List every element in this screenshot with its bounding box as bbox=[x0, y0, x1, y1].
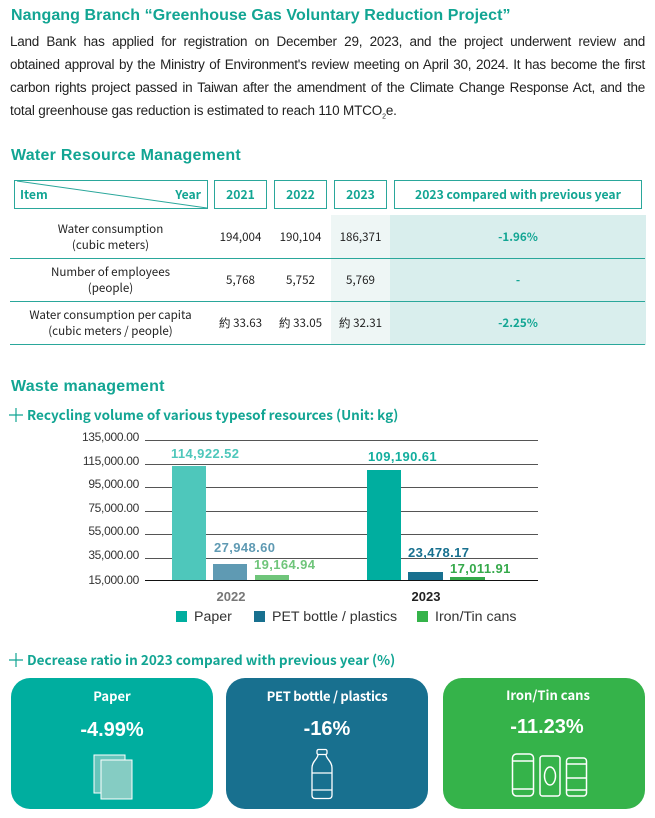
row 2 label: Number of employees bbox=[51, 264, 170, 280]
panel: paper bbox=[11, 678, 213, 809]
paper label: Paper bbox=[93, 686, 131, 705]
header: comparison bbox=[394, 180, 642, 209]
row 3 label: Water consumption per capita bbox=[29, 307, 192, 323]
row 1 2023: 186,371 bbox=[340, 229, 381, 245]
paper value: -4.99% bbox=[80, 719, 144, 741]
y axis labels: 15,000.00 bbox=[88, 573, 140, 587]
text block: project description: Land Bank has applied for registration on December 29, 2023, and the project underwent review and bbox=[10, 34, 645, 49]
heading: Water Resource Management: Water Resource Management bbox=[11, 147, 241, 164]
panel: PET bottle bbox=[226, 678, 428, 809]
header: Item / Year: Year bbox=[175, 185, 201, 203]
text block: project description: total greenhouse gas reduction is estimated to reach 110 MTCO2e. bbox=[10, 103, 397, 121]
y axis labels: 95,000.00 bbox=[88, 477, 140, 491]
highlighted comparison column bbox=[390, 215, 646, 345]
header: Item / Year: Item bbox=[20, 185, 48, 203]
y axis labels: 115,000.00 bbox=[83, 454, 140, 468]
bar chart: recycling volume bbox=[82, 430, 538, 625]
row 3 label: (cubic meters / people) bbox=[48, 323, 173, 339]
value labels: 27,948.60 bbox=[214, 540, 275, 555]
subheading: decrease ratio: Decrease ratio in 2023 compared with previous year (%) bbox=[27, 649, 395, 669]
panel: iron/tin cans bbox=[443, 678, 645, 809]
header: 2023: 2023 bbox=[346, 185, 375, 203]
legend: PET bottle / plastics bbox=[272, 609, 397, 625]
highlighted 2023 column bbox=[331, 215, 390, 345]
PET label: PET bottle / plastics bbox=[267, 686, 387, 705]
header: 2021: 2021 bbox=[226, 185, 255, 203]
row 1 label: (cubic meters) bbox=[72, 237, 149, 253]
row 2 2022: 5,752 bbox=[286, 272, 315, 288]
header: 2021 bbox=[214, 180, 267, 209]
row 3 label bbox=[29, 307, 192, 339]
header: comparison: 2023 compared with previous year bbox=[415, 185, 621, 203]
value labels: 23,478.17 bbox=[408, 545, 469, 560]
PET value: -16% bbox=[304, 718, 350, 740]
row 2 2023: 5,769 bbox=[346, 272, 375, 288]
row 2 label bbox=[51, 264, 170, 296]
row 3 2022: 約 33.05 bbox=[279, 315, 322, 331]
icon: bottle bbox=[311, 748, 333, 800]
cans label: Iron/Tin cans bbox=[506, 685, 590, 704]
text block: project description bbox=[10, 34, 646, 121]
legend bbox=[176, 609, 516, 625]
value labels: 19,164.94 bbox=[254, 557, 316, 572]
header: Item / Year bbox=[14, 180, 208, 209]
y axis labels: 75,000.00 bbox=[88, 501, 140, 515]
bars 2023 bbox=[367, 470, 485, 581]
y axis gridlines bbox=[145, 440, 538, 558]
y axis labels: 135,000.00 bbox=[82, 430, 140, 444]
y axis labels: 55,000.00 bbox=[88, 524, 140, 538]
value labels: 114,922.52 bbox=[171, 446, 239, 461]
header: 2023 bbox=[334, 180, 387, 209]
bars 2022 bbox=[172, 466, 289, 581]
y axis labels: 35,000.00 bbox=[88, 548, 140, 562]
row 3 2023: 約 32.31 bbox=[339, 315, 382, 331]
row 1 label: Water consumption bbox=[58, 221, 163, 237]
header: 2022: 2022 bbox=[286, 185, 315, 203]
row 1 2021: 194,004 bbox=[220, 229, 261, 245]
value labels: 109,190.61 bbox=[368, 449, 437, 464]
table: water resource management bbox=[10, 180, 646, 768]
row 2 change: - bbox=[516, 272, 520, 288]
row 3 2021: 約 33.63 bbox=[219, 315, 262, 331]
row 3 change: -2.25% bbox=[498, 315, 538, 331]
subheading: recycling volume: Recycling volume of various typesof resources (Unit: kg) bbox=[27, 404, 398, 424]
title: Nangang Branch: Nangang Branch “Greenhouse Gas Voluntary Reduction Project” bbox=[11, 7, 511, 24]
legend: Iron/Tin cans bbox=[435, 609, 516, 625]
row 1 2022: 190,104 bbox=[280, 229, 321, 245]
row 2 2021: 5,768 bbox=[226, 272, 255, 288]
header: 2022 bbox=[274, 180, 327, 209]
y axis labels bbox=[82, 430, 140, 587]
cans value: -11.23% bbox=[510, 716, 584, 738]
text block: project description: obtained approval by the Ministry of Environment's review meeting on April 30, 2024. It has become the first bbox=[10, 57, 645, 72]
icon: cans bbox=[512, 753, 588, 797]
value labels bbox=[171, 446, 511, 576]
row 1 change: -1.96% bbox=[498, 229, 538, 245]
x axis labels: 2023 bbox=[412, 589, 440, 604]
value labels: 17,011.91 bbox=[450, 561, 511, 576]
x axis labels: 2022 bbox=[217, 589, 245, 604]
row 1 label bbox=[58, 221, 163, 253]
text block: project description: carbon rights project passed in Taiwan after the amendment of the Climate Change Response Act, and the bbox=[10, 80, 645, 95]
icon: paper sheets bbox=[94, 754, 132, 800]
legend: Paper bbox=[194, 609, 232, 625]
row 2 label: (people) bbox=[88, 280, 133, 296]
x axis labels bbox=[217, 589, 440, 604]
heading: Waste management: Waste management bbox=[11, 378, 165, 395]
